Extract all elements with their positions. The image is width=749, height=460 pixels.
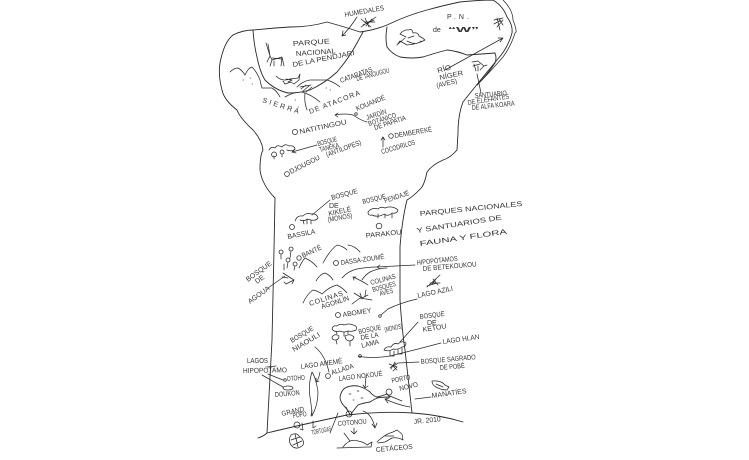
Bosque Tanéka: (ANTÍLOPES)	[325, 138, 362, 159]
country outline	[219, 0, 512, 438]
Parakou	[365, 223, 402, 240]
Grand Popo: GRAND	[281, 406, 305, 418]
Dassa-Zoumé: DASSA-ZOUMÉ	[340, 252, 385, 267]
icon: trees	[384, 342, 406, 356]
Porto Novo: PORTO	[391, 374, 411, 385]
Lagos Hipopotamo: DOUKON	[275, 390, 300, 399]
Bosque de la Lama	[332, 323, 403, 350]
Jardin botanico de Papatia	[335, 107, 407, 132]
Pendjari heading: NACIONAL	[296, 48, 336, 58]
Bosque de Agoua: AGOUA	[247, 285, 272, 306]
Rio Niger label with arrow	[436, 0, 516, 90]
Parakou: PARAKOU	[365, 229, 402, 240]
Pendjari heading: PARQUE	[293, 38, 330, 48]
Jardin botanico de Papatia: BOTÁNICO	[367, 110, 398, 128]
W heading: “W”	[448, 27, 479, 34]
Lago Hlan	[358, 334, 480, 358]
Bosque de la Lama: (MONOS)	[384, 323, 403, 334]
Bosque de Kikelé	[295, 188, 359, 224]
Santuario de elefantes label	[467, 74, 515, 112]
Lago Azili	[379, 286, 454, 317]
Bosque Tanéka: TANEKA	[319, 142, 340, 154]
Bosque de Kikelé: (MONOS)	[327, 213, 353, 224]
icon: lago acili bird	[427, 275, 440, 287]
icon: elephant and bird	[397, 29, 425, 45]
icon: trees	[295, 213, 318, 224]
Bosque de Ketou: BOSQUE	[419, 311, 445, 321]
Cotonou	[338, 407, 377, 434]
Bosque Niaouli: BOSQUE	[289, 325, 316, 345]
icon: elephant	[472, 61, 487, 71]
heading: Parques Nacionales: Y SANTUARIOS DE	[416, 215, 503, 235]
panel: Parque Nacional de la Pendjari	[253, 30, 363, 93]
Grand Popo	[281, 406, 312, 428]
Bosque de Kikelé: DE	[329, 203, 339, 210]
Djougou: DJOUGOU	[289, 155, 321, 176]
icon: fish	[337, 433, 372, 448]
W heading	[433, 14, 479, 34]
Lago Ahemé	[300, 356, 343, 416]
Pendjari heading: DE LA PENDJARI	[292, 50, 355, 69]
Bosque Niaouli	[289, 325, 329, 372]
Lago Ahemé: LAGO AHEMÉ	[300, 356, 343, 371]
Cataratas de Tanougou	[300, 67, 390, 92]
Bosque de Kikelé: KIKELÉ	[328, 204, 352, 218]
Rio Niger label with arrow: NÍGER	[439, 68, 464, 82]
icon: tree	[389, 362, 397, 371]
Lago Azili: LAGO AZILI	[417, 286, 454, 300]
Grand Popo: POPO	[292, 411, 308, 420]
W heading: P.N.	[447, 14, 469, 21]
icon: turtle	[289, 434, 304, 448]
icon: bird	[494, 18, 503, 30]
Bosque Niaouli: NIAOULI	[291, 332, 322, 354]
Santuario de elefantes label: DE ALFA KOARA	[471, 101, 515, 112]
Pendjari park border	[253, 30, 363, 93]
panel: P.N. de W	[386, 14, 503, 85]
Colinas Agonlin: AGONLÍN	[320, 293, 350, 311]
Colinas Agonlin: COLINAS	[308, 290, 344, 308]
Hipopotamos de Betekoukou: DE BETEKOUKOU	[423, 261, 477, 273]
Tortugas	[289, 413, 338, 448]
Bosque de la Lama: LAMA	[361, 339, 380, 350]
Bosque de Ketou	[384, 311, 447, 356]
W park border	[386, 27, 496, 85]
Hipopotamos de Betekoukou: HIPOPÓTAMOS	[416, 254, 458, 267]
heading: Parques Nacionales	[416, 201, 523, 248]
Djembereké / Cocodrilos: DEMBEREKÉ	[394, 124, 433, 140]
icon: wetland bird	[361, 17, 376, 27]
Abomey: ABOMEY	[342, 307, 372, 319]
W heading: de	[433, 27, 441, 34]
Colinas Boscosas: COLINAS	[370, 273, 397, 287]
signature: JR. 2010	[413, 416, 441, 426]
Santuario de elefantes label: DE ELEFANTES	[467, 93, 510, 107]
icon: big cat	[276, 74, 300, 84]
Humedales label with arrow: HUMEDALES	[344, 5, 385, 19]
Humedales label with arrow	[342, 5, 385, 36]
Tortugas: TORTUGAS	[311, 426, 332, 437]
river Niger	[477, 0, 516, 85]
Rio Niger label with arrow: (AVES)	[436, 78, 458, 90]
icon: trees	[332, 324, 357, 346]
Jardin botanico de Papatia: DE PAPATIA	[373, 115, 407, 132]
Bosque de Agoua	[245, 247, 297, 306]
Natitingou: NATITINGOU	[299, 119, 347, 136]
Manatíes	[415, 381, 467, 400]
icon: dolphin	[377, 430, 403, 443]
Colinas Boscosas	[353, 273, 397, 298]
Bosque de la Lama: BOSQUE	[358, 324, 382, 336]
Santuario de elefantes label: SANTUARIO	[475, 90, 507, 100]
Lagos Hipopotamo	[243, 358, 305, 399]
Lagos Hipopotamo: OTOHO	[287, 375, 305, 383]
heading: Parques Nacionales: PARQUES NACIONALES	[420, 201, 523, 218]
Porto Novo	[385, 374, 419, 407]
Hipopotamos de Betekoukou	[377, 254, 477, 273]
Sierra de Atacora: SIERRA	[261, 97, 300, 116]
Jardin botanico de Papatia: JARDÍN	[365, 107, 388, 122]
Colinas Boscosas: AVES	[379, 288, 394, 298]
Lago Nokoué	[338, 369, 390, 415]
Bosque Parakou	[362, 188, 411, 218]
Cataratas de Tanougou: CATARATAS	[339, 67, 374, 85]
heading: Parques Nacionales: FAUNA Y FLORA	[419, 229, 508, 248]
Lagos Hipopotamo: HIPOPÓTAMO	[243, 365, 288, 375]
Bosque Tanéka	[269, 136, 362, 159]
icon: antelope	[266, 43, 284, 66]
Sierra de Atacora: DE ATACORA	[308, 90, 361, 116]
Bosque de Kikelé: BOSQUE	[331, 188, 359, 202]
Allada	[326, 363, 355, 378]
Porto Novo: NOVO	[399, 381, 419, 393]
Cataratas de Tanougou: DE TANOUGOU	[356, 67, 390, 83]
Bosque Parakou: BOSQUE	[362, 193, 387, 206]
Colinas Boscosas: BOSQUES	[372, 281, 397, 294]
Allada: ALLADA	[330, 363, 355, 377]
Cetáceos: CETÁCEOS	[375, 442, 413, 454]
Bante: BANTÉ	[300, 243, 323, 260]
Kouandé: KOUANDÉ	[354, 93, 387, 113]
Bosque sagrado de Pobé: DE POBÉ	[439, 361, 465, 372]
Djembereké / Cocodrilos	[381, 124, 433, 156]
Bosque de Agoua: DE	[254, 274, 266, 286]
Bosque Tanéka: BOSQUE	[317, 136, 338, 148]
Bosque sagrado de Pobé: BOSQUE SAGRADO	[421, 354, 476, 366]
icon: trees	[269, 145, 295, 159]
Colinas Agonlin	[308, 290, 372, 311]
Manatíes: MANATÍES	[431, 386, 467, 400]
Bosque de Agoua: BOSQUE	[245, 260, 274, 284]
Bosque Parakou: PENDAJÉ	[383, 188, 411, 205]
Bassila: BASSILA	[287, 229, 316, 241]
Lagos Hipopotamo: LAGOS	[247, 358, 268, 365]
Bosque de Ketou: DE	[427, 320, 437, 327]
Rio Niger label with arrow: RÍO	[436, 62, 453, 75]
Bosque de la Lama: DE LA	[360, 332, 379, 342]
Bosque de Ketou: KETOU	[422, 323, 447, 334]
Djembereké / Cocodrilos: COCODRILOS	[381, 139, 416, 156]
Hills	[299, 245, 387, 303]
Lago Nokoué: LAGO NOKOUÉ	[338, 369, 383, 383]
Lago Hlan: LAGO HLAN	[442, 334, 480, 346]
icon: trees and deer	[279, 247, 297, 284]
Cotonou: COTONOU	[338, 418, 367, 428]
Bosque sagrado de Pobé	[389, 354, 476, 372]
Pendjari heading	[292, 38, 355, 69]
Sierra de Atacora	[230, 67, 361, 116]
